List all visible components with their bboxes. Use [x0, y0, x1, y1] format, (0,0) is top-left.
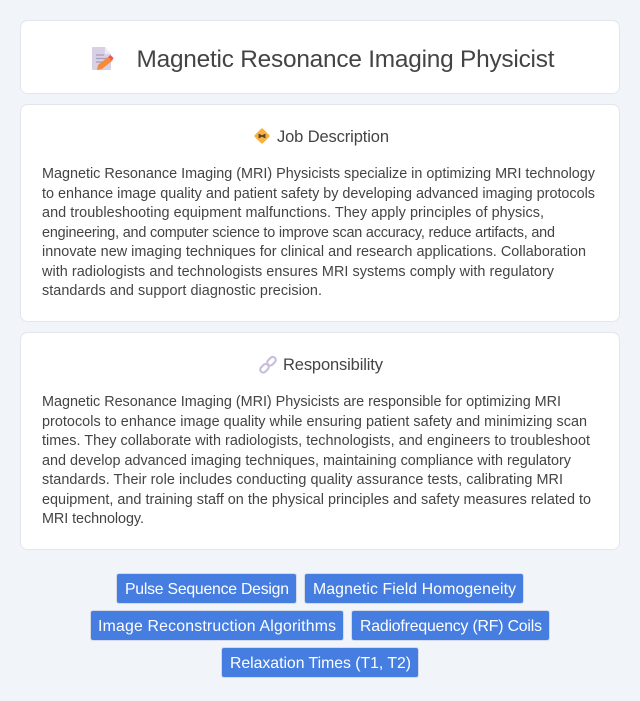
tag: radiofrequency coils: Radiofrequency (RF) Coils — [360, 618, 542, 635]
tags — [90, 574, 550, 678]
heading: job description: Job Description — [277, 128, 389, 146]
panel: responsibility — [20, 332, 620, 550]
icon: document with pencil — [92, 47, 114, 70]
tag: relaxation times: Relaxation Times (T1, T2) — [230, 655, 411, 672]
title text: Magnetic Resonance Imaging Physicist — [136, 46, 555, 73]
text block: job description — [41, 166, 596, 299]
tag: image reconstruction algorithms — [90, 610, 344, 640]
tag: relaxation times — [222, 648, 418, 678]
tag: pulse sequence design — [116, 574, 296, 604]
text block: job description: Magnetic Resonance Imaging (MRI) Physicists specialize in optimizing MRI technology — [42, 166, 596, 182]
text block: job description: engineering, and computer science to improve scan accuracy, reduce artifacts, and — [42, 225, 555, 241]
text block: responsibility: MRI technology. — [42, 511, 144, 527]
text block: responsibility — [42, 394, 591, 527]
text block: responsibility: standards. Their role includes conducting quality assurance tests, calibrating MRI — [42, 472, 563, 488]
tag: magnetic field homogeneity: Magnetic Field Homogeneity — [313, 581, 516, 598]
text block: responsibility: equipment, and training staff on the physical principles and safety measures related to — [42, 492, 591, 508]
text block: responsibility: protocols to enhance image quality while ensuring patient safety and minimizing scan — [42, 414, 587, 430]
text block: job description: to enhance image quality and patient safety by developing advanced imaging protocols — [42, 186, 595, 202]
icon: orange diamond — [254, 128, 270, 144]
text block: responsibility: and develop advanced imaging techniques, maintaining compliance with regulatory — [42, 453, 572, 469]
text block: job description: standards and support diagnostic precision. — [42, 283, 322, 299]
tag: magnetic field homogeneity — [304, 574, 524, 604]
text block: responsibility: times. They collaborate with radiologists, technologists, and engineers to troubleshoot — [42, 433, 590, 449]
text block: job description: with radiologists and technologists ensures MRI systems comply with regulatory — [41, 264, 555, 280]
heading: responsibility: Responsibility — [283, 356, 384, 374]
icon: chain link — [259, 356, 277, 374]
panel: job description — [20, 104, 620, 322]
tag: radiofrequency coils — [352, 610, 550, 640]
panel: title — [20, 20, 620, 94]
text block: responsibility: Magnetic Resonance Imaging (MRI) Physicists are responsible for optimizing MRI — [42, 394, 561, 410]
tag: image reconstruction algorithms: Image Reconstruction Algorithms — [98, 618, 336, 635]
text block: job description: and troubleshooting equipment malfunctions. They apply principles of physics, — [42, 205, 544, 221]
text block: job description: innovate new imaging techniques for clinical and research applications. Collaboration — [42, 244, 586, 260]
tag: pulse sequence design: Pulse Sequence Design — [125, 581, 289, 598]
